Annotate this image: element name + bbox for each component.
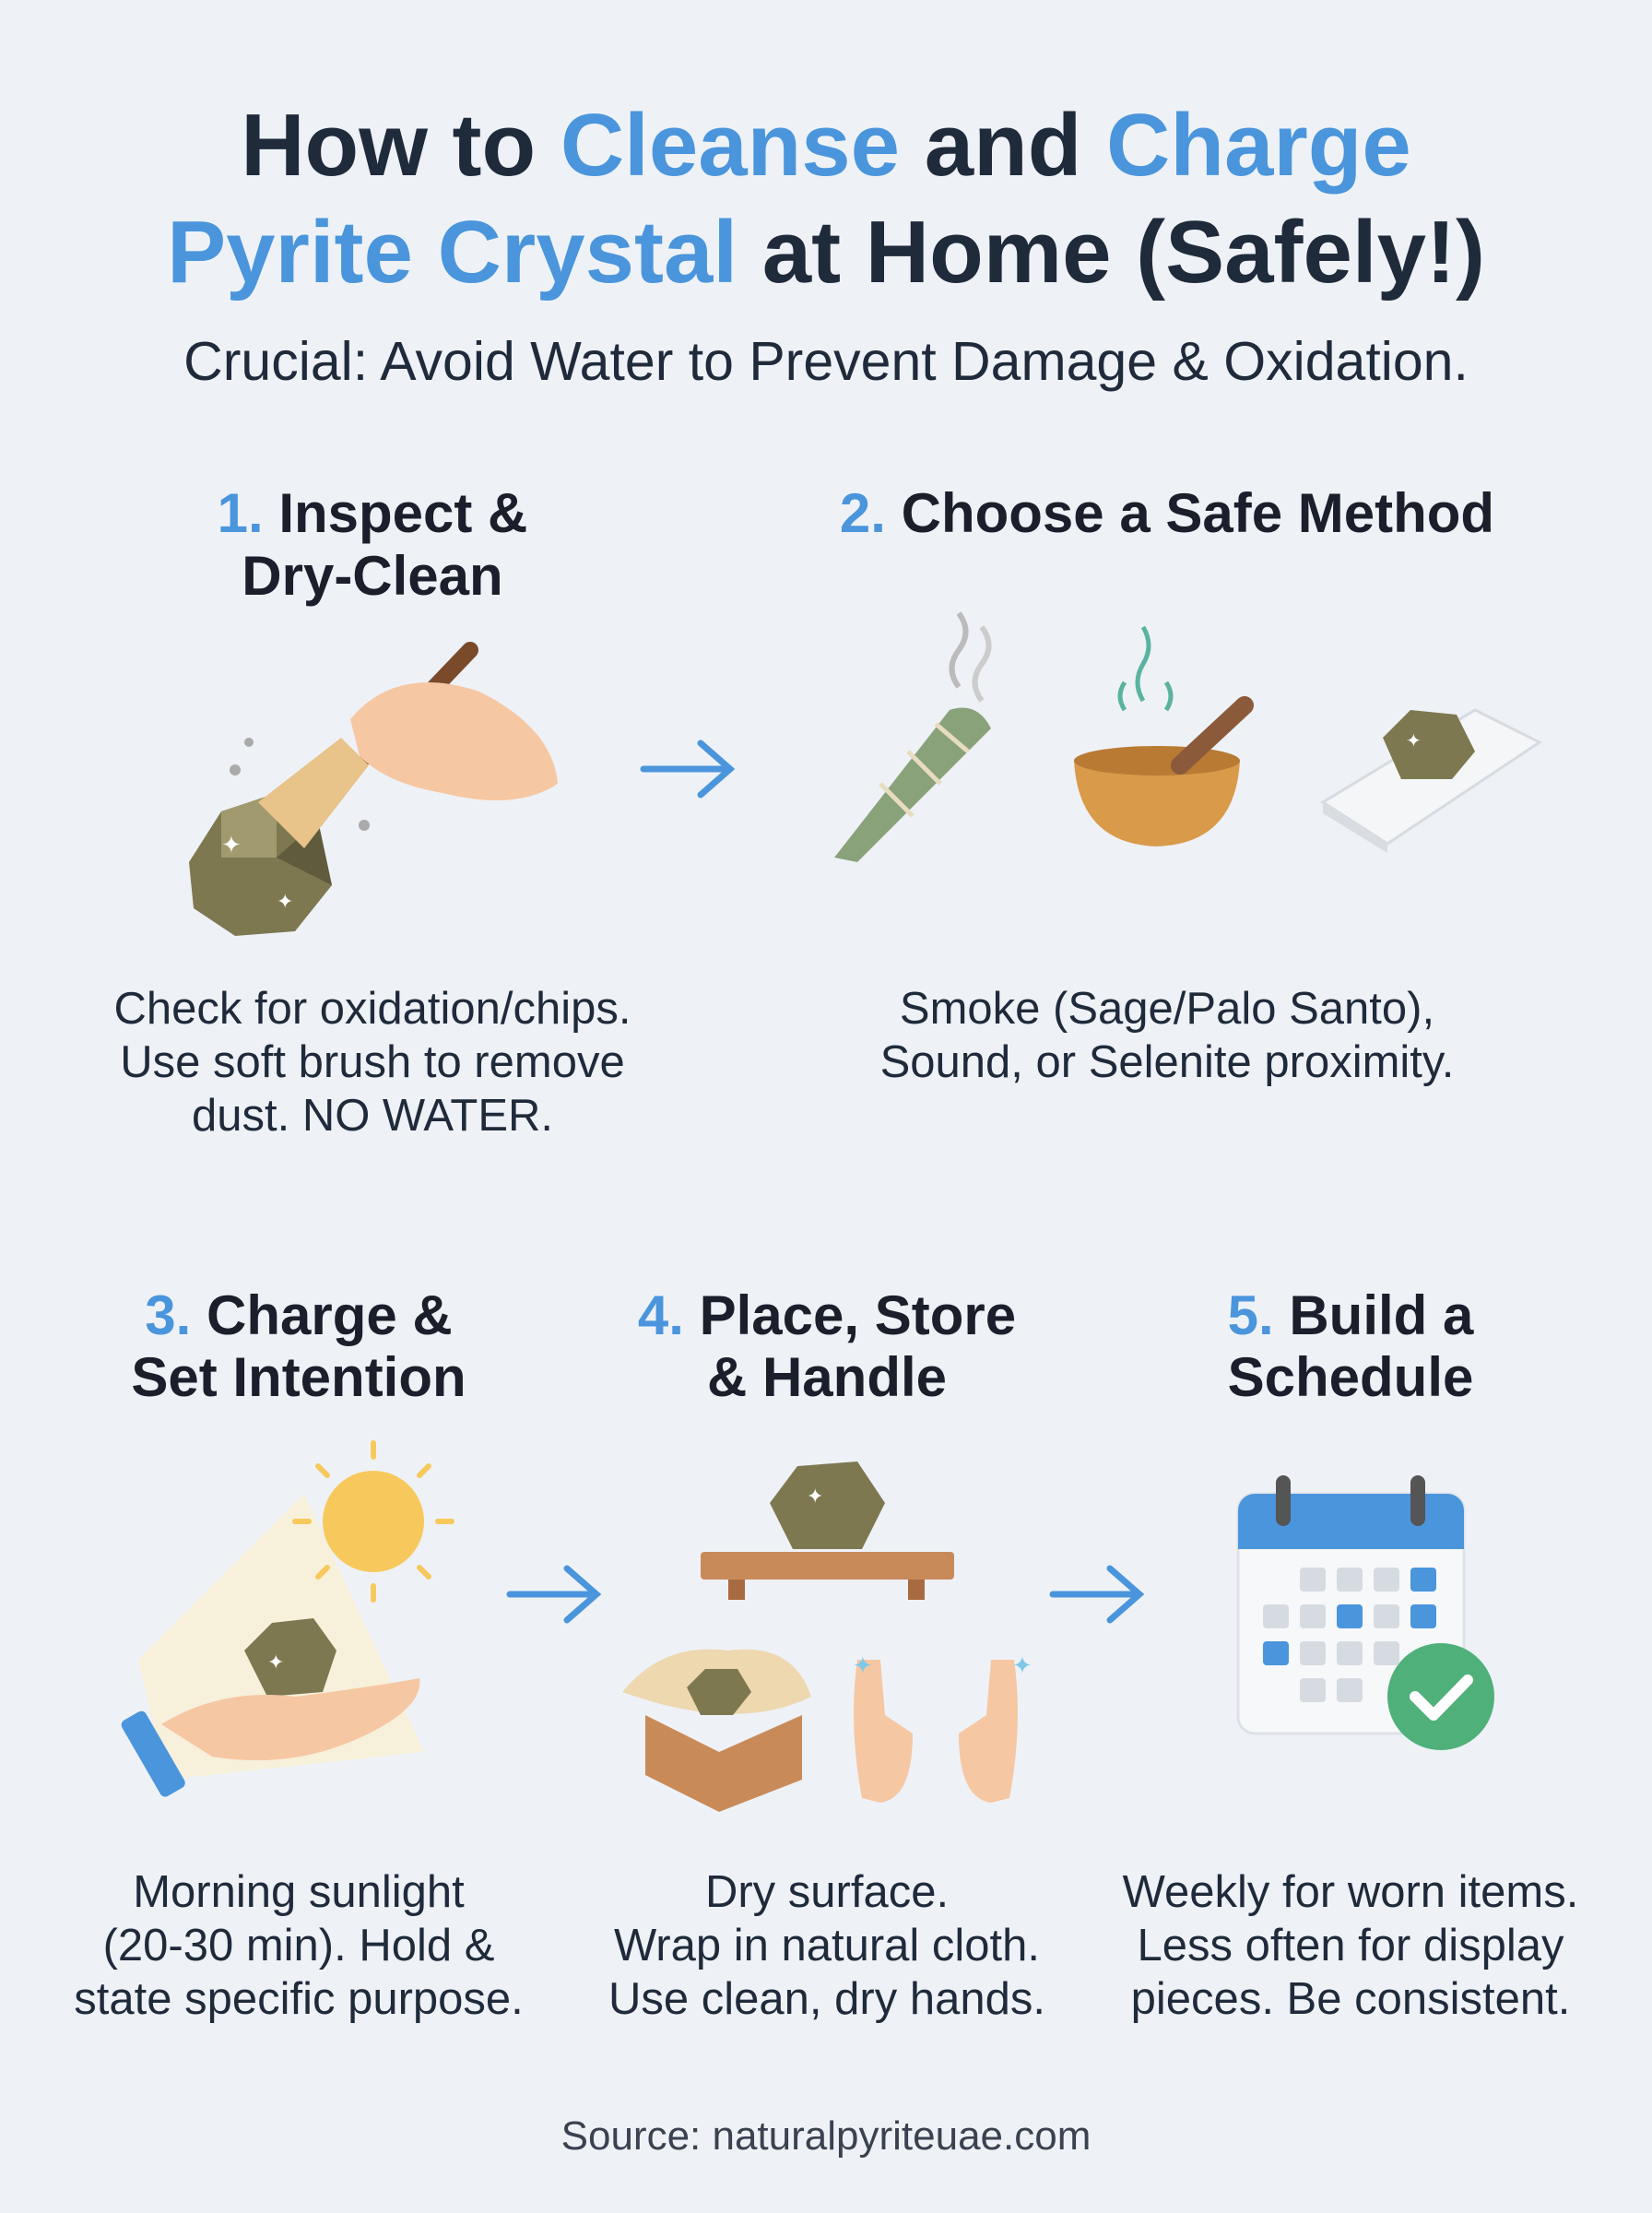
text 3: (20-30 min). Hold & <box>103 1921 494 1970</box>
heading: step 4: & Handle <box>707 1346 947 1408</box>
heading: step 4: 4. Place, Store <box>638 1284 1016 1346</box>
heading: step 1: Dry-Clean <box>242 545 503 607</box>
heading: step 5 <box>1228 1284 1474 1408</box>
arrow 2 <box>510 1568 596 1620</box>
text 5: pieces. Be consistent. <box>1131 1974 1570 2024</box>
subtitle: Crucial: Avoid Water to Prevent Damage & Oxidation. <box>183 331 1469 392</box>
icon: shelf, box and hands <box>622 1462 1032 1812</box>
text 4: Use clean, dry hands. <box>608 1974 1045 2024</box>
icon: brush and pyrite <box>189 650 558 936</box>
title: Pyrite Crystal at Home (Safely!) <box>167 203 1485 302</box>
text 1: Check for oxidation/chips. <box>113 984 631 1034</box>
heading: step 2: 2. Choose a Safe Method <box>840 482 1494 544</box>
title: How to Cleanse and Charge <box>241 96 1411 195</box>
icon: shelf, box and hands: ✦ <box>1012 1651 1032 1679</box>
text 4 <box>608 1867 1045 2024</box>
text 2: Smoke (Sage/Palo Santo), <box>900 984 1434 1034</box>
text 2 <box>880 984 1454 1087</box>
icon: shelf, box and hands: ✦ <box>807 1485 823 1508</box>
heading: step 1: 1. Inspect & <box>218 482 527 544</box>
icon: shelf, box and hands: ✦ <box>853 1651 873 1679</box>
heading: step 3: 3. Charge & <box>145 1284 453 1346</box>
arrow 1 <box>643 743 730 795</box>
icon: selenite with pyrite: ✦ <box>1406 731 1422 751</box>
text 3: state specific purpose. <box>74 1974 524 2024</box>
source: Source: naturalpyriteuae.com <box>561 2113 1091 2159</box>
icon: sun and hand <box>120 1443 452 1799</box>
icon: sage bundle <box>834 613 991 862</box>
text 2: Sound, or Selenite proximity. <box>880 1037 1454 1087</box>
text 5: Less often for display <box>1137 1921 1564 1970</box>
heading: step 4 <box>638 1284 1016 1408</box>
text 1 <box>113 984 631 1141</box>
heading: step 1 <box>218 482 527 607</box>
text 5 <box>1123 1867 1578 2024</box>
text 4: Wrap in natural cloth. <box>614 1921 1040 1970</box>
heading: step 5: 5. Build a <box>1228 1284 1474 1346</box>
icon: brush and pyrite: ✦ <box>277 890 293 913</box>
text 5: Weekly for worn items. <box>1123 1867 1578 1917</box>
arrow 3 <box>1053 1568 1139 1620</box>
text 4: Dry surface. <box>705 1867 949 1917</box>
title <box>167 96 1485 302</box>
heading: step 5: Schedule <box>1228 1346 1473 1408</box>
text 1: Use soft brush to remove <box>120 1037 625 1087</box>
icon: brush and pyrite: ✦ <box>221 831 242 858</box>
text 3 <box>74 1867 524 2024</box>
icon: sun and hand: ✦ <box>267 1651 284 1674</box>
text 1: dust. NO WATER. <box>192 1091 553 1141</box>
icon: selenite with pyrite <box>1323 710 1540 853</box>
icon: calendar <box>1238 1475 1494 1750</box>
icon: singing bowl <box>1074 627 1245 846</box>
heading: step 3: Set Intention <box>131 1346 466 1408</box>
heading: step 3 <box>131 1284 466 1408</box>
text 3: Morning sunlight <box>133 1867 465 1917</box>
